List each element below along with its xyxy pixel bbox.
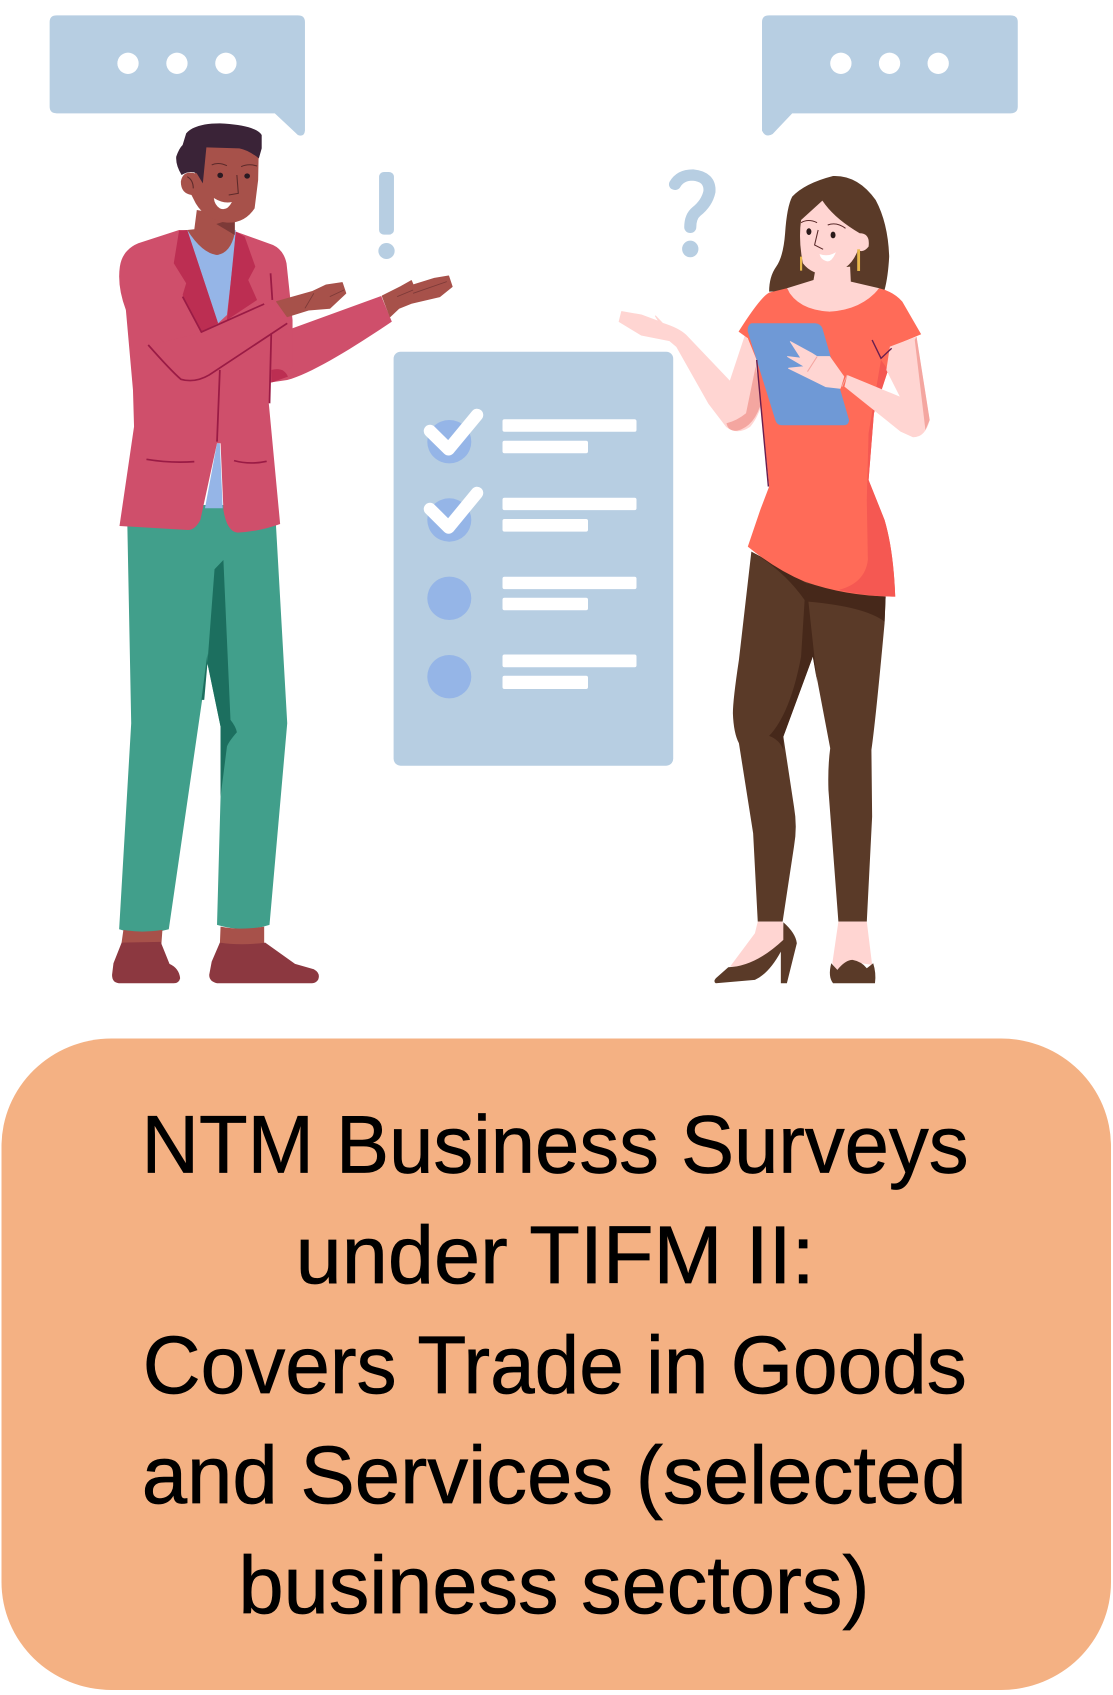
checklist item 4	[427, 654, 636, 698]
caption text: Covers Trade in Goods	[143, 1320, 967, 1411]
icon: question mark	[675, 175, 710, 257]
checklist item 1	[427, 415, 636, 463]
caption text: and Services (selected	[142, 1430, 967, 1521]
checklist item 2	[427, 493, 636, 542]
caption text: under TIFM II:	[296, 1210, 815, 1301]
caption text: NTM Business Surveys	[142, 1100, 968, 1190]
panel: checklist	[394, 352, 673, 766]
figure: man	[112, 123, 452, 983]
caption text	[142, 1100, 968, 1631]
panel: caption	[2, 1038, 1111, 1690]
caption text: business sectors)	[238, 1540, 870, 1631]
icon: left speech bubble	[50, 15, 305, 136]
checklist item 3	[427, 577, 636, 620]
icon: right speech bubble	[762, 15, 1018, 136]
figure: woman	[619, 176, 930, 983]
icon: exclamation mark	[378, 172, 395, 259]
